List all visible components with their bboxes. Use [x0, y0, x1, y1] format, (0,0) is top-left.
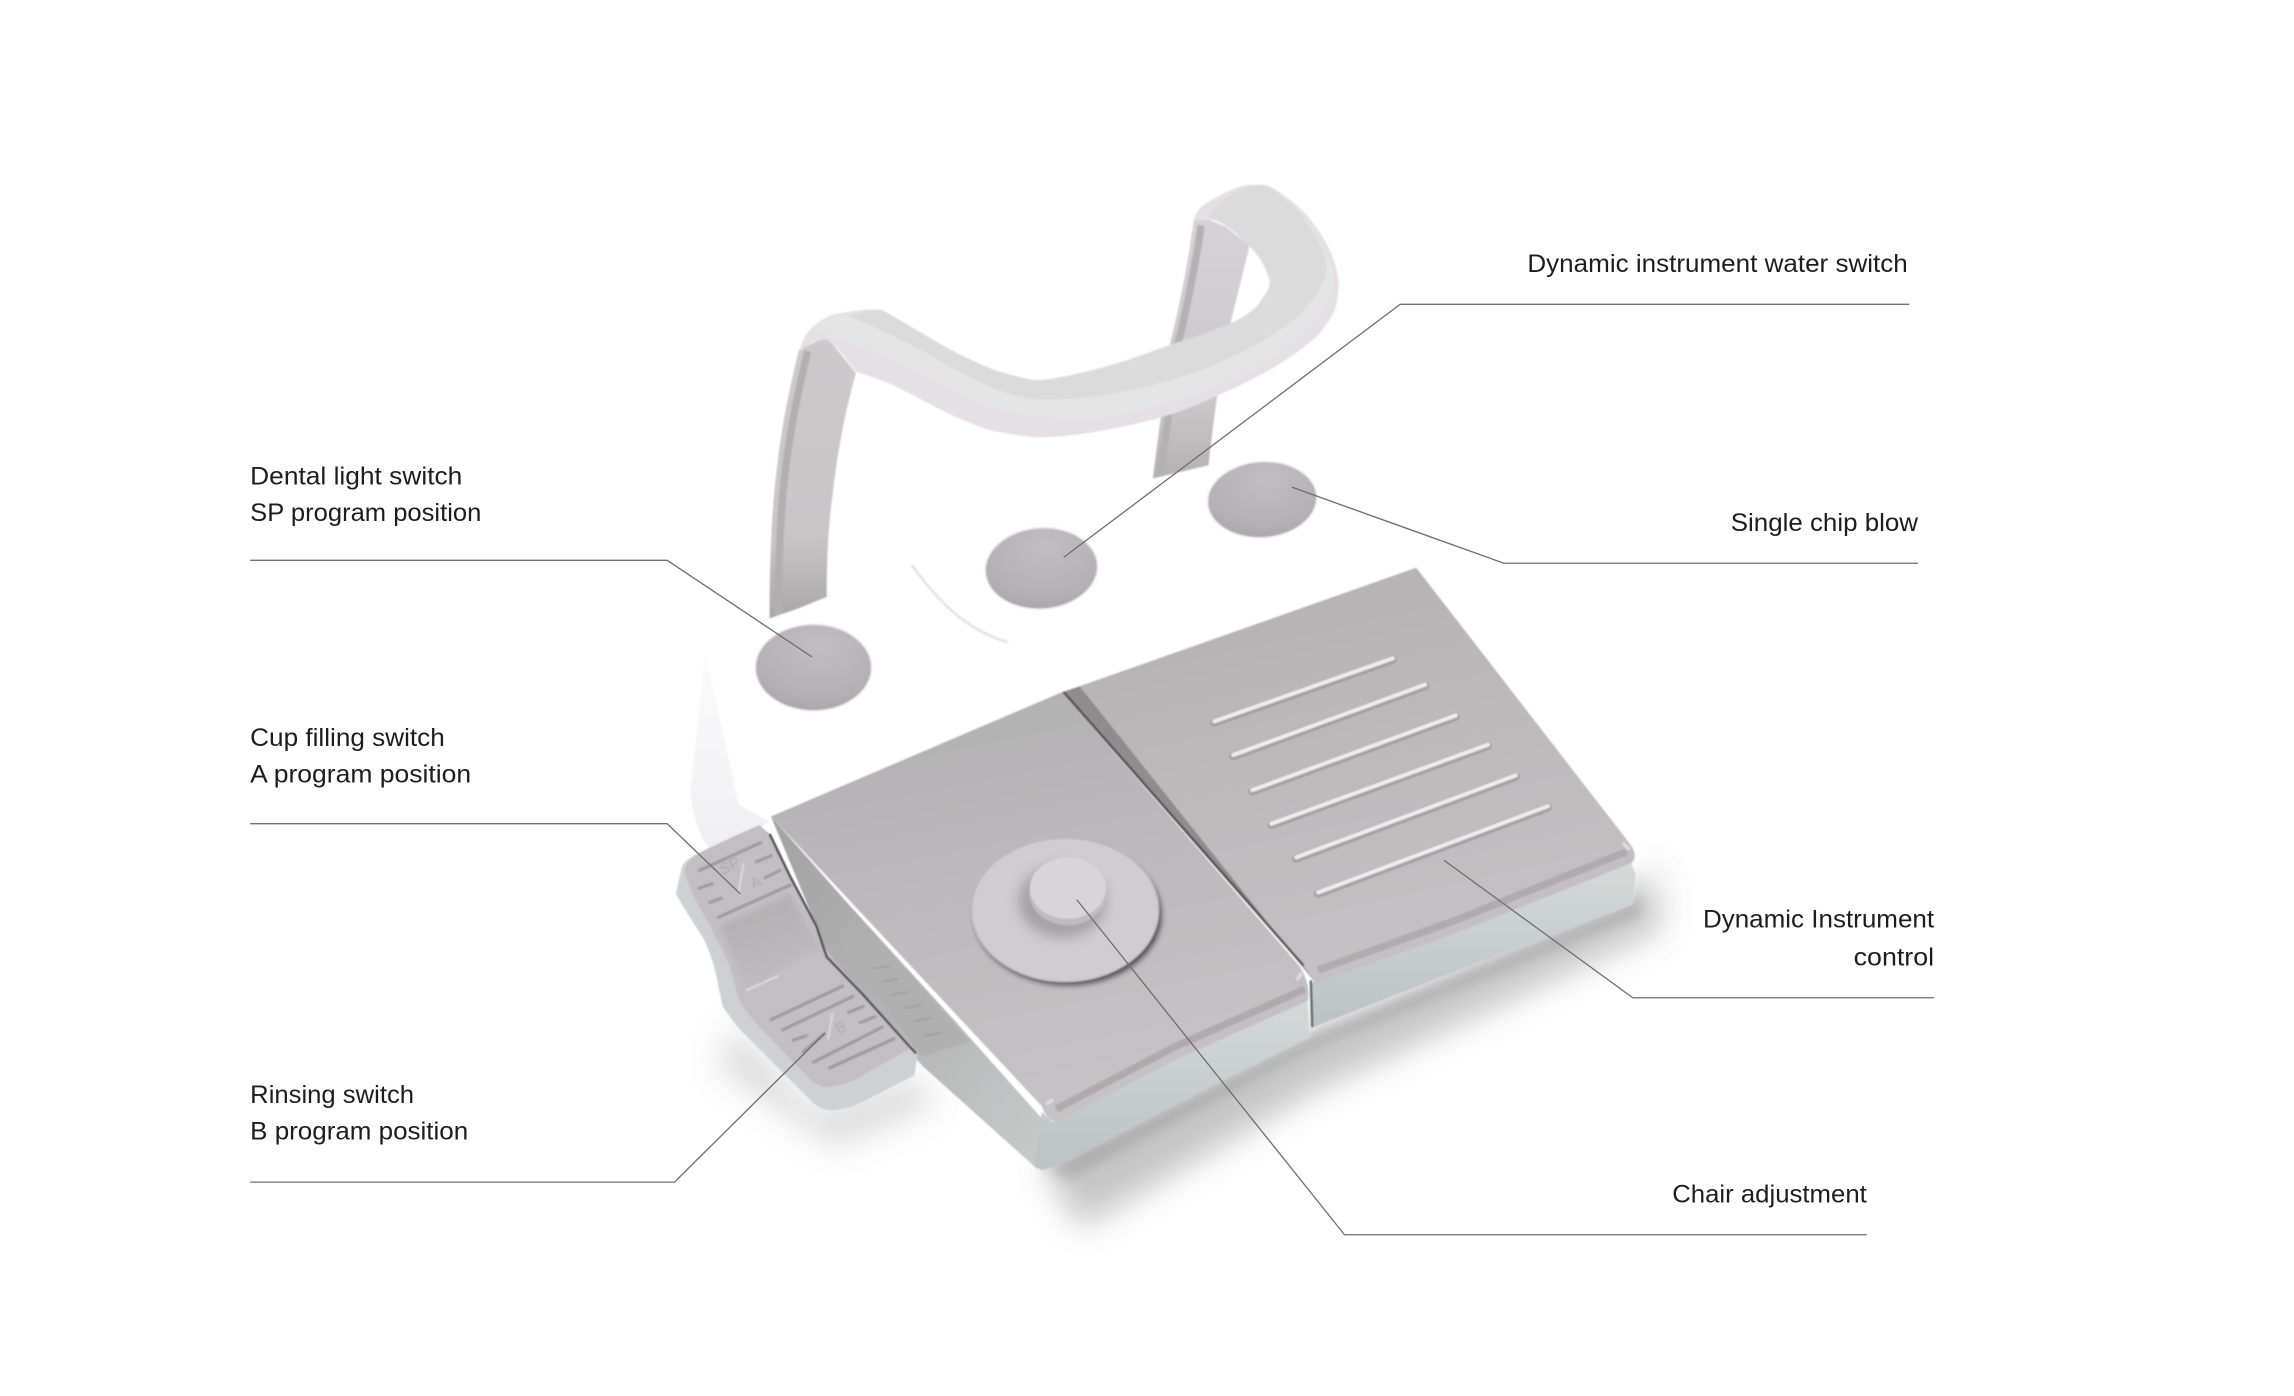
leader: dental light	[250, 560, 812, 657]
handle: left leg	[770, 336, 856, 620]
disc dark rim	[974, 845, 1162, 985]
leader: instrument control	[1444, 860, 1934, 998]
right plate highlight	[1624, 844, 1628, 849]
handle: grip middle band	[812, 185, 1334, 419]
label: cup filling switch: Cup filling switch	[250, 725, 445, 752]
label: dynamic instrument control	[1703, 907, 1934, 972]
label: rinsing switch: Rinsing switch	[250, 1082, 414, 1109]
left plate front	[1034, 999, 1309, 1170]
pedal marking A: A	[748, 873, 765, 893]
leader: chair adjustment	[1077, 900, 1867, 1235]
label: dental light switch: Dental light switch	[250, 463, 462, 490]
right plate	[1080, 568, 1635, 983]
left leg dark edge	[778, 351, 808, 616]
label: single chip blow: Single chip blow	[1731, 510, 1918, 537]
label: rinsing switch: B program position	[250, 1119, 468, 1146]
foot control device	[676, 185, 1662, 1229]
left plate bevel	[1056, 989, 1305, 1109]
joystick disc	[971, 838, 1159, 982]
pedal ramp	[720, 894, 821, 989]
label: dynamic instrument control: Dynamic Instrument	[1703, 907, 1934, 934]
leader: water switch	[1064, 304, 1909, 557]
side panel face	[771, 816, 1049, 1169]
side panel ribs	[873, 966, 941, 1036]
button: chip blow	[1205, 458, 1319, 541]
label: rinsing switch	[250, 1082, 468, 1146]
chair joystick	[971, 838, 1162, 985]
left leg body	[770, 336, 856, 620]
drop shadow	[717, 863, 1662, 1229]
pedal outer body	[676, 825, 917, 1110]
small pedal	[676, 825, 917, 1110]
housing centre panel line	[911, 565, 1008, 642]
right plate front	[1311, 863, 1636, 1027]
pedal upper ridges	[699, 843, 894, 1068]
handle: right leg	[1153, 219, 1249, 478]
leader: chip blow	[1292, 487, 1918, 563]
pedal top face	[685, 825, 911, 1087]
nub base	[1029, 860, 1107, 925]
leader: cup filling	[250, 824, 740, 894]
label: dynamic instrument water switch: Dynamic instrument water switch	[1527, 251, 1908, 278]
label: cup filling switch	[250, 725, 471, 789]
right leg dark edge	[1160, 225, 1201, 475]
left plate highlight	[1048, 974, 1301, 1103]
pedal marking SP: SP	[717, 854, 743, 879]
right plate bevel	[1318, 851, 1627, 970]
leader: rinsing	[250, 1033, 825, 1182]
label: dental light switch	[250, 463, 481, 527]
leader lines	[250, 304, 1934, 1235]
left plate side panel	[771, 816, 1049, 1169]
handle: grip outer band	[799, 185, 1339, 437]
left plate	[771, 692, 1309, 1122]
button: dental light	[755, 624, 872, 711]
plate ridges	[1214, 658, 1548, 894]
nub shadow	[1018, 865, 1106, 938]
plate gap wedge	[1062, 686, 1312, 1027]
pedal dark seam	[770, 834, 916, 1053]
label: dental light switch: SP program position	[250, 500, 481, 527]
side panel rib band	[843, 933, 970, 1056]
pedal ramp highlight	[746, 976, 778, 990]
label: cup filling switch: A program position	[250, 762, 471, 789]
housing side	[691, 654, 772, 859]
nub top	[1030, 857, 1106, 919]
button: instrument water	[982, 524, 1100, 613]
label: chair adjustment: Chair adjustment	[1672, 1182, 1867, 1209]
pedal marking B: B	[833, 1018, 849, 1038]
label: dynamic instrument control: control	[1854, 945, 1934, 972]
right leg body	[1153, 219, 1249, 478]
handle: grip top face	[849, 185, 1327, 400]
housing top	[705, 443, 1448, 822]
